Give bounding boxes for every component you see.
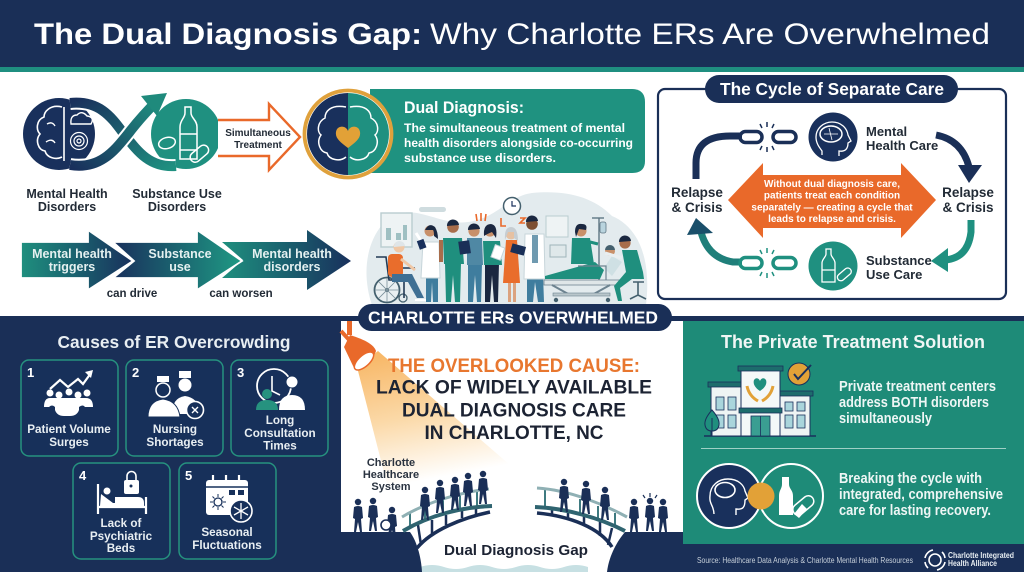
arrow: mental health disorders: disorders (264, 260, 321, 274)
nurse blue (468, 263, 482, 302)
icon: brain and bottle joined (697, 464, 823, 528)
panel: dual diagnosis definition (370, 89, 645, 173)
label: relapse and crisis right: Relapse (942, 185, 994, 200)
arrow: mental health disorders (222, 230, 351, 290)
label: relapse and crisis left: & Crisis (671, 200, 723, 215)
source line: Source: Healthcare Data Analysis & Charlotte Mental Health Resources (697, 556, 913, 565)
IV stand (598, 218, 600, 283)
wheelchair patient (374, 278, 400, 302)
label: mental health disorders: Mental Health (26, 187, 108, 201)
arrow: simultaneous treatment: Treatment (234, 140, 283, 151)
center double arrow: patients treat each condition (764, 190, 900, 202)
card 3: long consultation times: Consultation (244, 427, 316, 440)
panel: causes of ER overcrowding (0, 316, 341, 572)
definition text: substance use disorders. (404, 151, 556, 165)
footer (683, 544, 1024, 572)
pill heading: The Cycle of Separate Care (720, 79, 944, 99)
people crossing left bridge (353, 471, 488, 540)
title: The Dual Diagnosis Gap: (34, 18, 422, 51)
logo (925, 550, 945, 570)
card 5: seasonal fluctuations (179, 463, 276, 559)
nurse at bedside (571, 238, 594, 264)
card 2: nursing shortages: 2 (132, 365, 139, 380)
card 1: patient volume surges (21, 360, 118, 456)
card 2: nursing shortages: Shortages (146, 436, 204, 449)
seated nurse (619, 237, 631, 249)
label: Charlotte healthcare system: Charlotte (367, 457, 415, 469)
label: mental health care: Health Care (866, 138, 938, 153)
card 5: seasonal fluctuations: Fluctuations (192, 539, 262, 552)
right cliff and bridge (535, 488, 683, 572)
icon: interlinked infinity of mental health and substance use (23, 93, 221, 170)
label: dual diagnosis gap: Dual Diagnosis Gap (444, 542, 588, 559)
text: address both disorders: address BOTH disorders (839, 395, 989, 411)
card 4: lack of psychiatric beds: Beds (107, 542, 136, 555)
panel: private treatment solution (683, 321, 1024, 544)
definition banner (370, 89, 645, 173)
arrow: mental health triggers: triggers (49, 260, 95, 274)
card 2: nursing shortages (126, 360, 223, 456)
card 3: long consultation times: Long (266, 414, 294, 427)
arrow: substance use (113, 230, 242, 290)
label: can worsen: can worsen (209, 288, 273, 300)
center double arrow: leads to relapse and crisis. (768, 214, 896, 225)
panel: cycle of separate care (658, 75, 1006, 299)
icon: substance use care (808, 242, 858, 290)
text: address both disorders: Private treatment centers (839, 379, 996, 395)
nurse with notes (485, 263, 499, 302)
label: substance use care: Substance (866, 253, 932, 268)
definition text: health disorders alongside co-occurring (404, 136, 633, 150)
label: substance use care: Use Care (866, 267, 922, 282)
card 4: lack of psychiatric beds (73, 463, 170, 559)
banner: Charlotte ERs overwhelmed: CHARLOTTE ERs OVERWHELMED (368, 308, 658, 328)
label: substance use disorders: Substance Use (132, 187, 222, 201)
center double arrow: Without dual diagnosis care, (764, 179, 900, 190)
label: relapse and crisis right: & Crisis (942, 200, 994, 215)
label: Charlotte healthcare system: System (371, 481, 411, 493)
text: breaking the cycle: Breaking the cycle with (839, 471, 982, 487)
label: Charlotte healthcare system: Healthcare (363, 469, 419, 481)
text: breaking the cycle: integrated, comprehensive (839, 487, 1003, 503)
text: breaking the cycle: care for lasting recovery. (839, 503, 991, 519)
title: Why Charlotte ERs Are Overwhelmed (430, 18, 990, 51)
pill heading (705, 75, 958, 103)
card 3: long consultation times: Times (263, 440, 297, 452)
card 3: long consultation times (231, 360, 328, 456)
headline statement: LACK OF WIDELY AVAILABLE (376, 378, 652, 398)
card 3: long consultation times: 3 (237, 365, 244, 380)
arrow: top left with broken chain (696, 122, 796, 179)
arrow: mental health triggers: Mental health (32, 247, 112, 261)
heading: Causes of ER Overcrowding (58, 332, 290, 352)
card 4: lack of psychiatric beds: Lack of (101, 517, 142, 530)
left cliff and bridge (340, 489, 492, 572)
label: can drive: can drive (107, 288, 157, 300)
heading: The Private Treatment Solution (721, 331, 985, 352)
headline: THE OVERLOOKED CAUSE: (388, 356, 640, 377)
card 5: seasonal fluctuations: Seasonal (201, 526, 253, 539)
arrow: substance use: use (169, 260, 191, 274)
woman in orange dress (503, 240, 520, 283)
card 2: nursing shortages: Nursing (153, 423, 197, 436)
nurse man teal (445, 263, 461, 302)
people stranded on right bridge (559, 479, 668, 532)
arrow: mental health disorders: Mental health (252, 247, 332, 261)
panel: the overlooked cause (340, 321, 683, 572)
label: mental health care: Mental (866, 124, 907, 139)
icon: integrated brain with heart (304, 90, 392, 178)
process arrows (21, 230, 351, 290)
card 4: lack of psychiatric beds: Psychiatric (90, 530, 153, 543)
headline statement: DUAL DIAGNOSIS CARE (402, 400, 626, 422)
divider line: lower panels (0, 316, 1024, 321)
arrow: top right (936, 135, 982, 183)
arrow: bottom left with broken chain (687, 218, 796, 278)
divider (701, 448, 1006, 449)
organisation name: Charlotte Integrated (948, 551, 1014, 560)
label: substance use disorders: Disorders (148, 200, 206, 214)
doctor with clipboard (426, 276, 438, 302)
monitor board (546, 216, 568, 237)
organisation name: Health Alliance (948, 559, 997, 568)
card 1: patient volume surges: Surges (49, 436, 89, 449)
water (420, 565, 588, 572)
wall clock (504, 198, 520, 214)
card 1: patient volume surges: Patient Volume (27, 423, 111, 436)
hospital bed and patient (545, 262, 604, 279)
icon: treatment center building (704, 363, 816, 436)
arrow: substance use: Substance (148, 247, 212, 261)
arrow: bottom right (931, 220, 971, 272)
doctor man (527, 274, 544, 302)
alarm marks (476, 213, 525, 226)
wall chart (381, 213, 412, 247)
text: address both disorders: simultaneously (839, 411, 932, 427)
headline statement: IN CHARLOTTE, NC (424, 423, 604, 444)
label: mental health disorders: Disorders (38, 200, 96, 214)
center double arrow: separately — creating a cycle that (751, 202, 913, 214)
card 1: patient volume surges: 1 (27, 365, 34, 380)
label: relapse and crisis left: Relapse (671, 185, 723, 200)
definition text: The simultaneous treatment of mental (404, 121, 625, 135)
spotlight beam (357, 351, 510, 488)
arrow: mental health triggers (21, 230, 133, 290)
card 4: lack of psychiatric beds: 4 (79, 468, 87, 483)
banner: Charlotte ERs overwhelmed (358, 304, 672, 331)
definition heading: Dual Diagnosis: (404, 98, 524, 117)
header band (0, 0, 1024, 72)
arrow: simultaneous treatment: Simultaneous (225, 128, 291, 139)
card 5: seasonal fluctuations: 5 (185, 468, 192, 483)
arrow: simultaneous treatment (218, 104, 300, 170)
center double arrow (728, 163, 936, 238)
illustration: overwhelmed ER staff and patients (366, 192, 647, 305)
icon: spotlight (341, 321, 377, 373)
icon: mental health care (808, 112, 858, 162)
